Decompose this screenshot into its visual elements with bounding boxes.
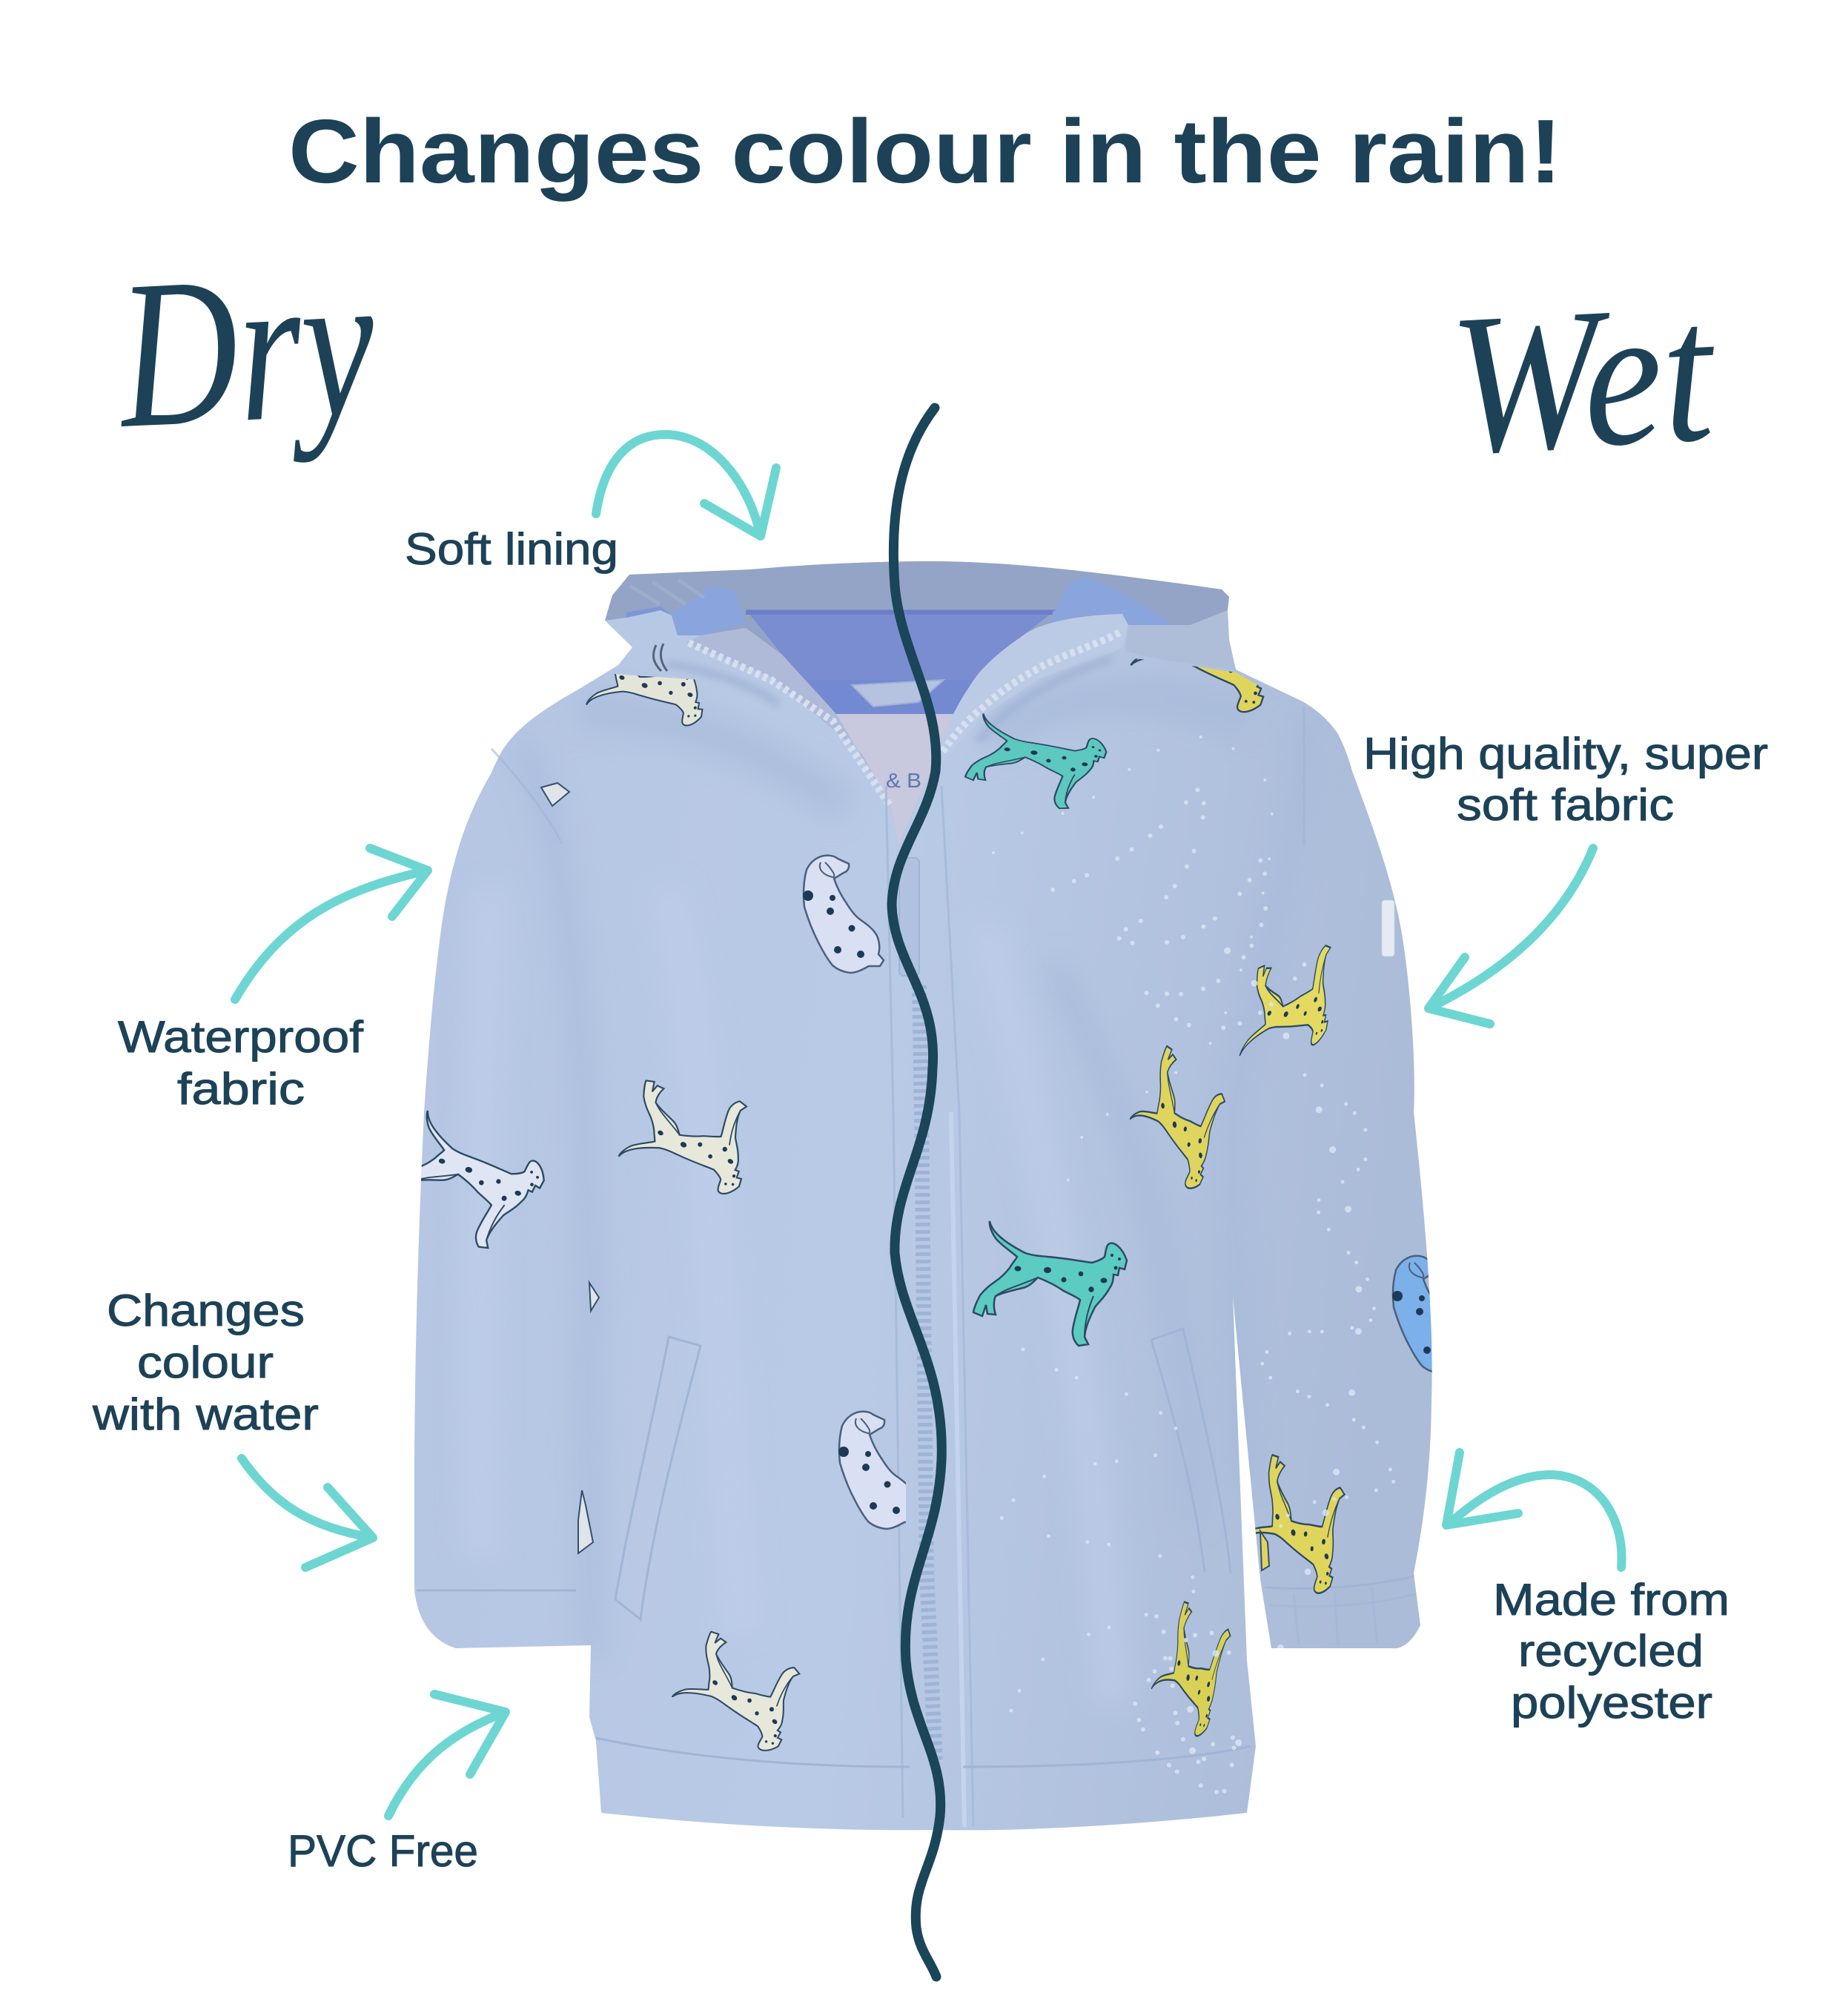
zipper: [689, 632, 1119, 1827]
dog: cream bottom: [672, 1631, 801, 1751]
dog: teal upper: [964, 713, 1108, 812]
dog: yellow hood: [1130, 658, 1265, 713]
title: Changes colour in the rain!: [288, 101, 1562, 202]
dog: yellow sleeve: [1239, 945, 1331, 1056]
label: Soft lining: [405, 524, 618, 574]
jacket illustration: [383, 558, 1473, 1830]
arrow: [1446, 1452, 1621, 1567]
right hood outer: [1125, 610, 1236, 670]
left facing: [686, 628, 890, 806]
callout: Made from recycled polyester: [1446, 1452, 1730, 1728]
label: Made from: [1493, 1575, 1730, 1625]
arrow: [596, 434, 776, 536]
dog: sitting white lower: [838, 1410, 906, 1530]
dog: teal lower: [973, 1221, 1127, 1346]
hanger loop: [852, 680, 944, 707]
callout: High quality fabric: [1363, 729, 1768, 1024]
hood dog leg stripes: [653, 644, 667, 671]
heading: Dry: Dry: [110, 225, 382, 472]
heading: Wet: Wet: [1445, 260, 1724, 496]
dog: yellow chest: [1130, 1045, 1226, 1189]
dog: white sleeve: [421, 1111, 545, 1249]
dog: yellow hem: [1151, 1601, 1231, 1737]
hood stripes: [630, 580, 704, 604]
water droplets: [993, 737, 1394, 1794]
arrow: [1429, 848, 1593, 1024]
label: PVC Free: [288, 1826, 478, 1876]
lining band: [746, 609, 1056, 714]
centre divider line: [892, 408, 941, 1977]
seams, pockets and hems: [417, 707, 1416, 1767]
collar roll: [937, 614, 1128, 764]
label: polyester: [1511, 1678, 1712, 1728]
dog fragments: [541, 783, 1269, 1570]
collar shadows: [667, 658, 1112, 741]
right lining flap: [1051, 577, 1174, 625]
inner neck label: [836, 714, 961, 845]
label: Waterproof: [118, 1012, 363, 1062]
arrow: [242, 1458, 373, 1567]
sleeve badge: [1382, 900, 1394, 956]
dog: sitting blue: [1392, 1256, 1473, 1373]
dog: cream hood: [586, 674, 703, 727]
callout: PVC Free: [288, 1694, 506, 1876]
jacket silhouette: [414, 561, 1432, 1830]
fabric shading: [529, 692, 1250, 1630]
arrow: [388, 1694, 506, 1816]
hood interior and neck: [605, 561, 1236, 845]
callout: Waterproof fabric: [118, 848, 428, 1114]
dog prints: [383, 558, 1473, 1771]
label: recycled: [1518, 1626, 1704, 1676]
zip pull: [899, 858, 919, 976]
hood interior and neck: & B: [886, 769, 921, 792]
label: Changes: [107, 1286, 305, 1335]
small lining strip: [626, 607, 672, 618]
dog: yellow cuff: [1255, 1453, 1346, 1594]
label: fabric: [177, 1064, 305, 1114]
callout: Changes colour with water: [92, 1286, 373, 1567]
label: High quality, super: [1363, 729, 1768, 779]
label: soft fabric: [1457, 780, 1674, 830]
dog: sitting white upper: [803, 856, 884, 973]
label: with water: [92, 1389, 319, 1439]
label: colour: [137, 1338, 274, 1387]
arrow: [235, 848, 428, 999]
dog: cream centre: [618, 1080, 748, 1194]
left lining flap: [672, 586, 746, 635]
callout: Soft lining: [405, 434, 776, 574]
